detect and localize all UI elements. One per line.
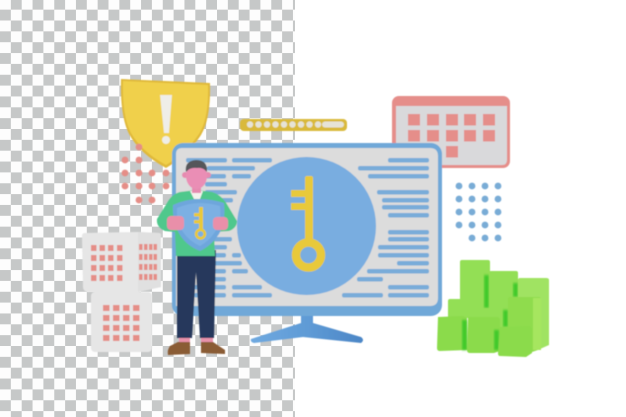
shoes bbox=[168, 341, 225, 355]
code lines bbox=[186, 158, 429, 298]
trousers bbox=[177, 250, 216, 338]
green jacket bbox=[157, 190, 237, 256]
shield key bbox=[194, 207, 205, 238]
bottom cube bbox=[91, 292, 152, 352]
monitor bbox=[172, 143, 442, 316]
held blue shield bbox=[173, 199, 224, 251]
green bar blocks bbox=[437, 260, 549, 357]
exclamation mark bbox=[160, 95, 172, 144]
transparency checkerboard background bbox=[0, 0, 295, 417]
icon: yellow warning shield bbox=[121, 79, 210, 168]
blue dot grid bbox=[456, 183, 501, 241]
bottom cube windows bbox=[103, 305, 140, 341]
calendar bbox=[392, 96, 510, 168]
red dot grid bbox=[122, 144, 169, 203]
top cube bbox=[82, 232, 161, 292]
progress bar bbox=[240, 119, 347, 131]
white shirt bbox=[190, 191, 203, 199]
person holding shield bbox=[157, 160, 237, 355]
key circle bbox=[237, 157, 376, 295]
top cube windows bbox=[91, 244, 157, 281]
monitor stand bbox=[251, 314, 363, 343]
icon: large yellow key bbox=[291, 176, 321, 268]
neck bbox=[192, 184, 201, 193]
calendar date squares bbox=[408, 114, 495, 158]
socks bbox=[179, 337, 190, 342]
head bbox=[182, 160, 211, 189]
hands bbox=[167, 216, 228, 230]
